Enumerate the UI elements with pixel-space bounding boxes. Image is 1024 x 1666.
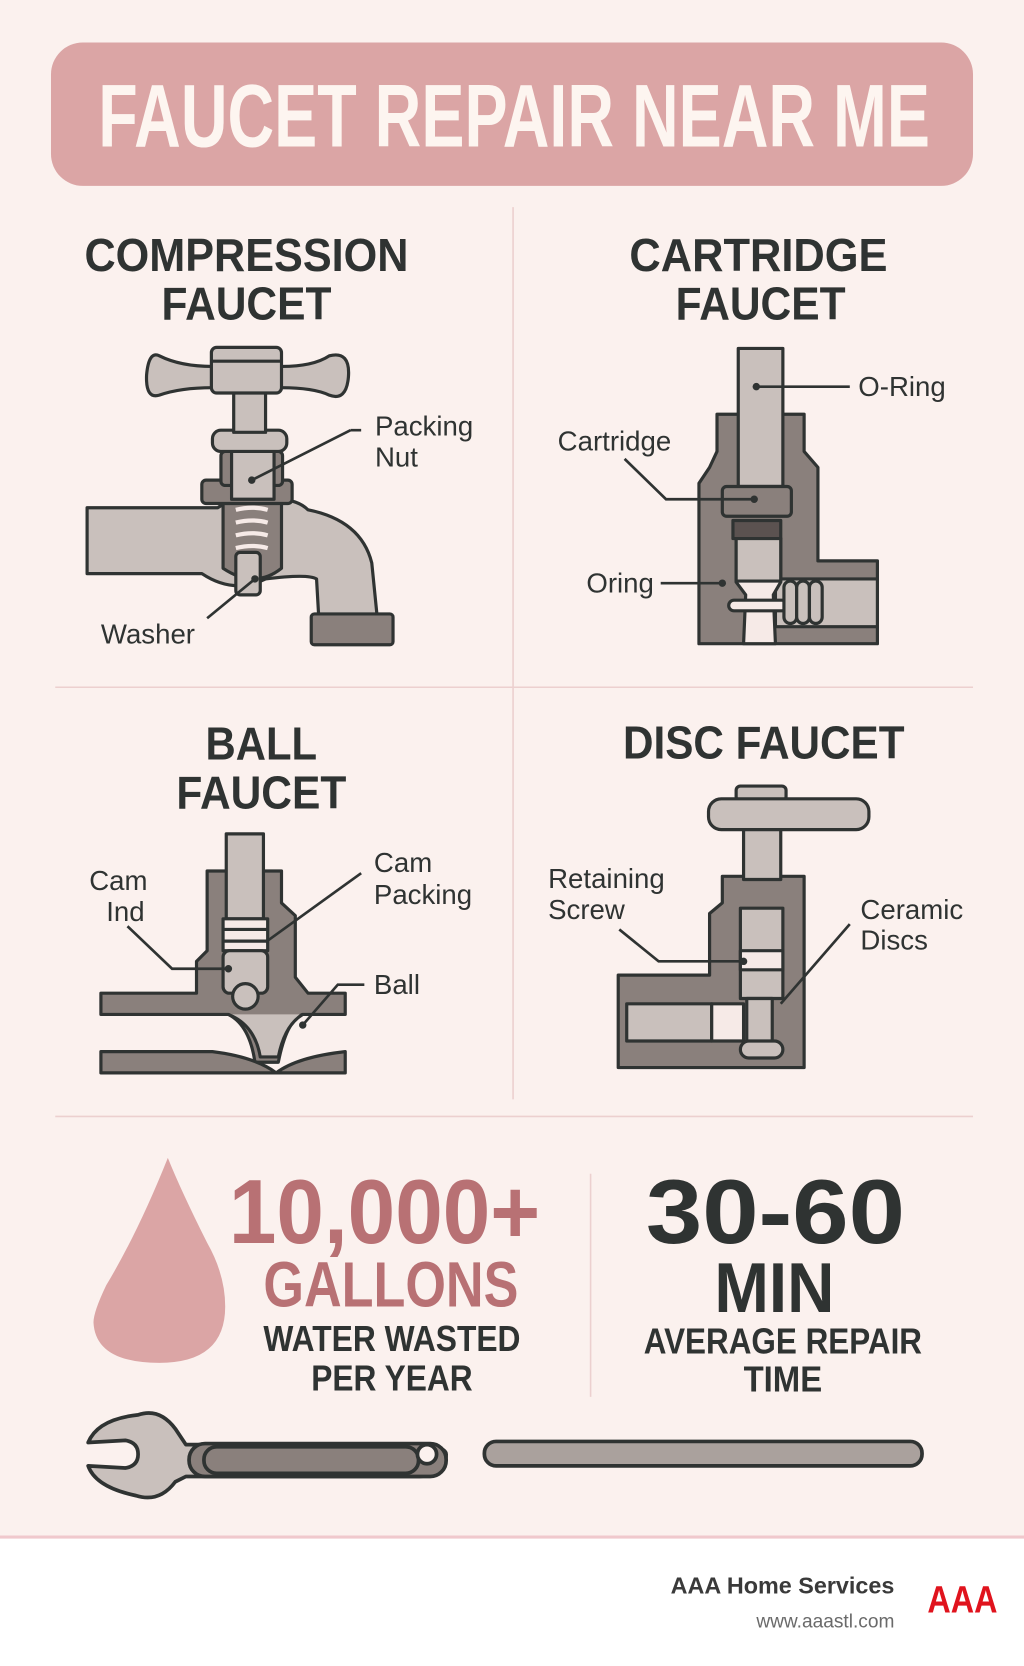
callout: packing nut [248,411,473,484]
callout: oring [586,568,726,599]
stat: gallons wasted: PER YEAR [311,1357,473,1398]
heading: disc faucet: DISC FAUCET [623,716,905,768]
callout: washer [101,575,259,650]
panel: cartridge faucet [558,229,946,644]
heading: ball faucet [176,717,347,818]
heading: ball faucet: BALL [206,717,317,769]
callout: ceramic discs: Discs [860,925,928,956]
heading: compression faucet [84,229,408,330]
callout: retaining screw: Screw [548,894,625,925]
title [51,42,973,186]
icon: bar [484,1441,922,1466]
callout: cartridge [558,425,758,503]
callout: oring: Oring [586,568,654,599]
icon: water drop [93,1158,225,1363]
callout: ball: Ball [374,969,420,1000]
heading: compression faucet: COMPRESSION [84,229,408,281]
callout: cam packing [266,847,472,942]
panel: disc faucet [548,716,963,1068]
callout: cam packing: Packing [374,879,472,910]
callout: ball [299,969,420,1029]
callout: o-ring [753,371,946,402]
diagram: disc faucet [618,786,869,1068]
icon: wrench [88,1413,446,1498]
footer: brand: www.aaastl.com [755,1611,894,1632]
callout: cam packing: Cam [374,847,432,878]
heading: cartridge faucet: CARTRIDGE [629,229,888,281]
footer: brand [671,1572,997,1632]
stat: gallons wasted [229,1161,540,1398]
stat: repair time: MIN [714,1249,834,1327]
heading: cartridge faucet: FAUCET [676,278,846,330]
callout: retaining screw: Retaining [548,863,665,894]
callout: o-ring: O-Ring [858,371,946,402]
diagram: compression faucet [87,347,393,645]
callout: cam ind [89,865,232,972]
callout: packing nut: Nut [375,441,418,472]
panel: compression faucet [84,229,473,650]
diagram: cartridge faucet [699,348,877,644]
stat: gallons wasted: 10,000+ [229,1161,540,1263]
callout: packing nut: Packing [375,411,473,442]
stat: repair time: TIME [744,1359,822,1400]
callout: cam ind: Ind [106,896,145,927]
panel: ball faucet [89,717,472,1073]
callout: washer: Washer [101,619,195,650]
logo: AAA: AAA [927,1578,997,1621]
stat: gallons wasted: WATER WASTED [263,1318,520,1359]
callout: retaining screw [548,863,747,965]
footer: brand: AAA Home Services [671,1572,894,1598]
stat: repair time [644,1161,922,1400]
callout: cam ind: Cam [89,865,148,896]
callout: cartridge: Cartridge [558,425,671,456]
heading: cartridge faucet [629,229,888,330]
heading: ball faucet: FAUCET [176,766,347,818]
stat: repair time: AVERAGE REPAIR [644,1320,922,1361]
heading: compression faucet: FAUCET [161,278,332,330]
stat: repair time: 30-60 [646,1161,905,1263]
diagram: ball faucet [101,834,345,1073]
callout: ceramic discs [781,894,963,1004]
callout: ceramic discs: Ceramic [860,894,963,925]
stat: gallons wasted: GALLONS [263,1249,518,1321]
